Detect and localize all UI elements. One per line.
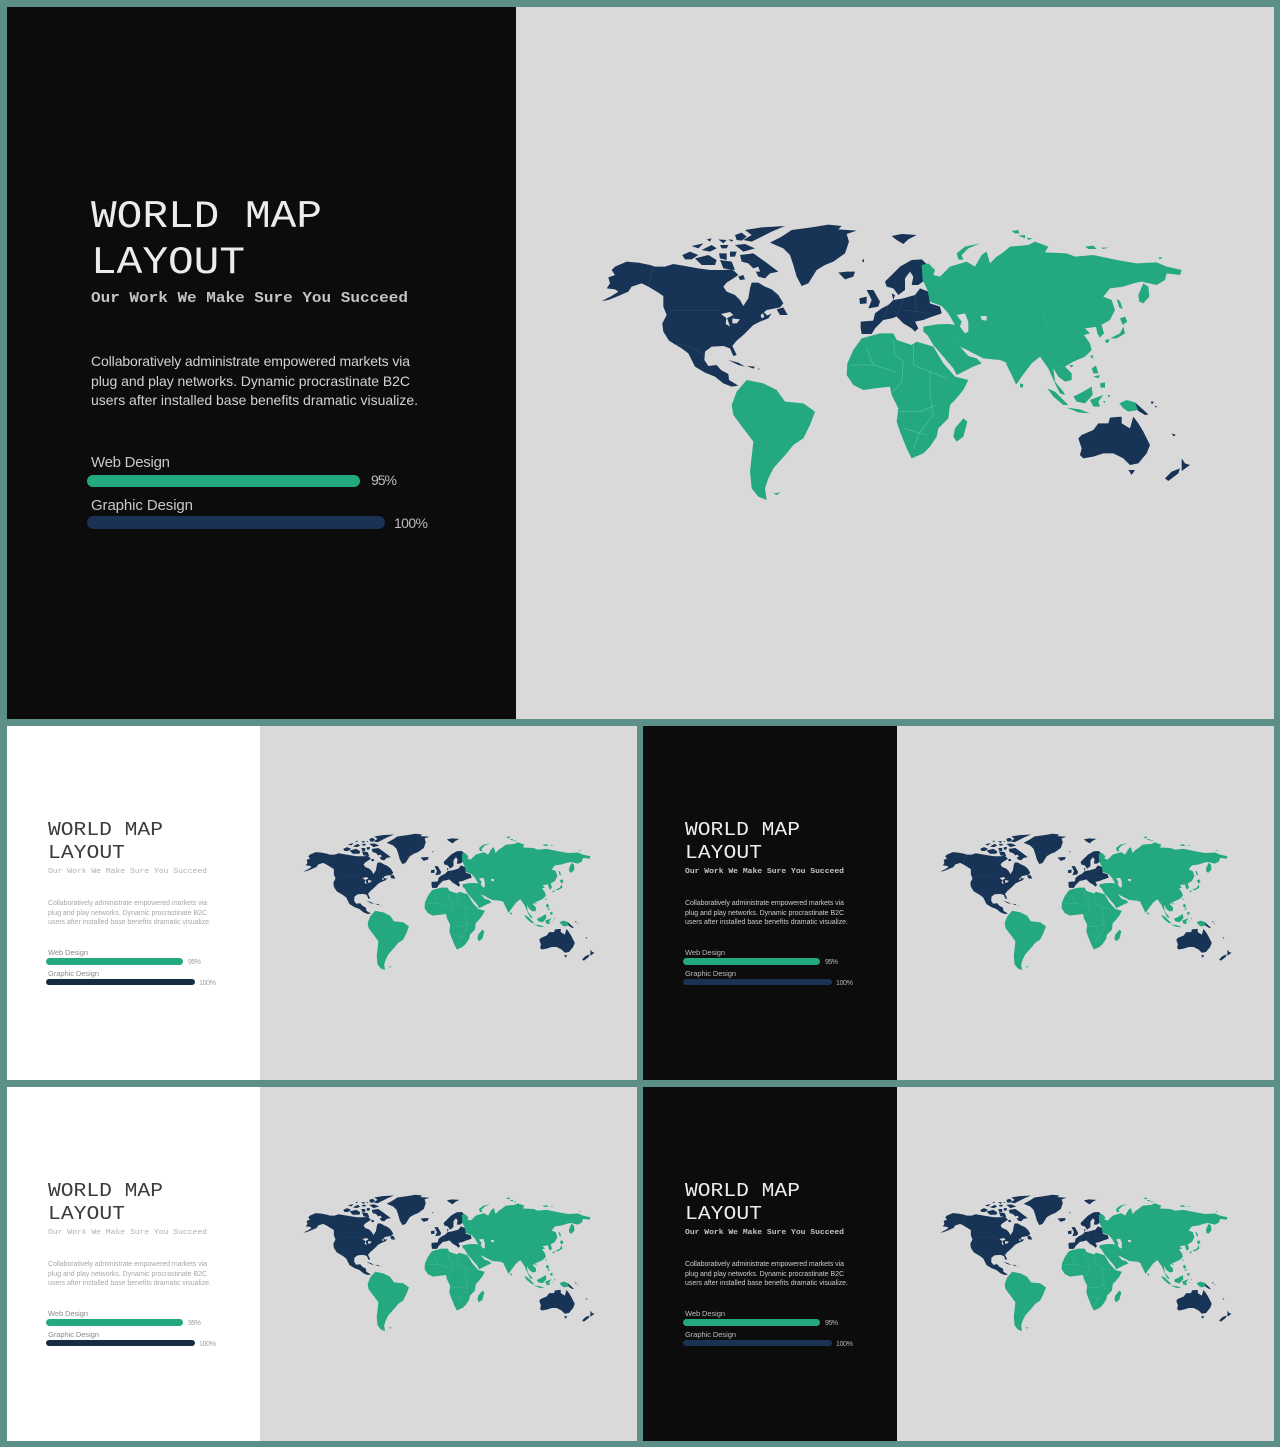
white sidebar	[7, 1087, 260, 1441]
title	[91, 195, 322, 285]
panel: main dark sidebar	[7, 7, 516, 719]
progress: web design: Web Design	[91, 454, 170, 471]
progress: web design: Web Design	[48, 948, 88, 957]
subtitle: Our Work We Make Sure You Succeed	[685, 868, 844, 876]
panel: small slide, white, bottom left	[7, 1087, 637, 1441]
body text: plug and play networks. Dynamic procrastinate B2C	[48, 910, 207, 917]
body text	[685, 1261, 848, 1287]
progress: web design: 95%	[825, 959, 838, 966]
title: WORLD MAP	[48, 1180, 163, 1202]
body text	[48, 1261, 211, 1287]
progress: graphic design	[87, 497, 428, 531]
body text: plug and play networks. Dynamic procrastinate B2C	[685, 1271, 844, 1278]
title: WORLD MAP	[685, 819, 800, 841]
progress: graphic design: Graphic Design	[91, 497, 193, 514]
title	[48, 819, 163, 864]
world map	[602, 225, 1190, 500]
panel: small slide, dark, top right	[643, 726, 1274, 1080]
body text: Collaboratively administrate empowered markets via	[685, 900, 844, 907]
progress: web design	[46, 948, 201, 966]
map background	[260, 726, 637, 1080]
title: WORLD MAP	[48, 819, 163, 841]
subtitle: Our Work We Make Sure You Succeed	[48, 1229, 207, 1237]
body text: users after installed base benefits dramatic visualize.	[48, 919, 211, 926]
panel: small slide, dark, bottom right	[643, 1087, 1274, 1441]
title: LAYOUT	[685, 1203, 762, 1225]
title: WORLD MAP	[685, 1180, 800, 1202]
progress: web design	[46, 1309, 201, 1327]
progress: web design	[683, 948, 838, 966]
title: LAYOUT	[48, 1203, 125, 1225]
title: LAYOUT	[91, 241, 245, 285]
progress: web design: 95%	[188, 959, 201, 966]
title: LAYOUT	[685, 842, 762, 864]
progress: graphic design: Graphic Design	[685, 969, 736, 978]
body text: Collaboratively administrate empowered markets via	[48, 1261, 207, 1268]
title	[685, 819, 800, 864]
title: WORLD MAP	[91, 195, 322, 239]
title	[48, 1180, 163, 1225]
progress: web design: Web Design	[685, 1309, 725, 1318]
progress: graphic design: 100%	[836, 980, 853, 987]
progress: web design: 95%	[188, 1320, 201, 1327]
subtitle: Our Work We Make Sure You Succeed	[48, 868, 207, 876]
body text	[685, 900, 848, 926]
title	[685, 1180, 800, 1225]
body text	[48, 900, 211, 926]
white sidebar	[7, 726, 260, 1080]
panel: main slide	[7, 7, 1274, 719]
dark sidebar	[643, 1087, 897, 1441]
progress: graphic design	[46, 969, 216, 987]
progress: web design	[683, 1309, 838, 1327]
progress: web design: Web Design	[48, 1309, 88, 1318]
progress: graphic design: 100%	[199, 980, 216, 987]
progress: web design: 95%	[825, 1320, 838, 1327]
progress: graphic design: Graphic Design	[48, 1330, 99, 1339]
map background	[897, 726, 1274, 1080]
progress: graphic design: 100%	[836, 1341, 853, 1348]
map background	[260, 1087, 637, 1441]
map background	[897, 1087, 1274, 1441]
body text: Collaboratively administrate empowered markets via	[91, 353, 410, 369]
panel: main map background	[516, 7, 1274, 719]
progress: graphic design	[46, 1330, 216, 1348]
progress: web design: Web Design	[685, 948, 725, 957]
subtitle: Our Work We Make Sure You Succeed	[91, 290, 408, 307]
progress: graphic design: 100%	[394, 515, 428, 531]
dark sidebar	[643, 726, 897, 1080]
body text: plug and play networks. Dynamic procrastinate B2C	[685, 910, 844, 917]
world map	[940, 1195, 1232, 1331]
body text	[91, 353, 418, 408]
progress: graphic design	[683, 1330, 853, 1348]
body text: Collaboratively administrate empowered markets via	[685, 1261, 844, 1268]
body text: users after installed base benefits dramatic visualize.	[685, 1280, 848, 1287]
body text: Collaboratively administrate empowered markets via	[48, 900, 207, 907]
world map	[303, 1195, 595, 1331]
body text: plug and play networks. Dynamic procrastinate B2C	[48, 1271, 207, 1278]
world map	[940, 834, 1232, 970]
progress: graphic design	[683, 969, 853, 987]
panel: small slide, white, top left	[7, 726, 637, 1080]
body text: plug and play networks. Dynamic procrastinate B2C	[91, 373, 410, 389]
body text: users after installed base benefits dramatic visualize.	[685, 919, 848, 926]
title: LAYOUT	[48, 842, 125, 864]
subtitle: Our Work We Make Sure You Succeed	[685, 1229, 844, 1237]
body text: users after installed base benefits dramatic visualize.	[48, 1280, 211, 1287]
body text: users after installed base benefits dramatic visualize.	[91, 392, 418, 408]
progress: graphic design: Graphic Design	[48, 969, 99, 978]
world map	[303, 834, 595, 970]
progress: web design	[87, 454, 397, 488]
progress: graphic design: 100%	[199, 1341, 216, 1348]
progress: graphic design: Graphic Design	[685, 1330, 736, 1339]
progress: web design: 95%	[371, 472, 397, 488]
